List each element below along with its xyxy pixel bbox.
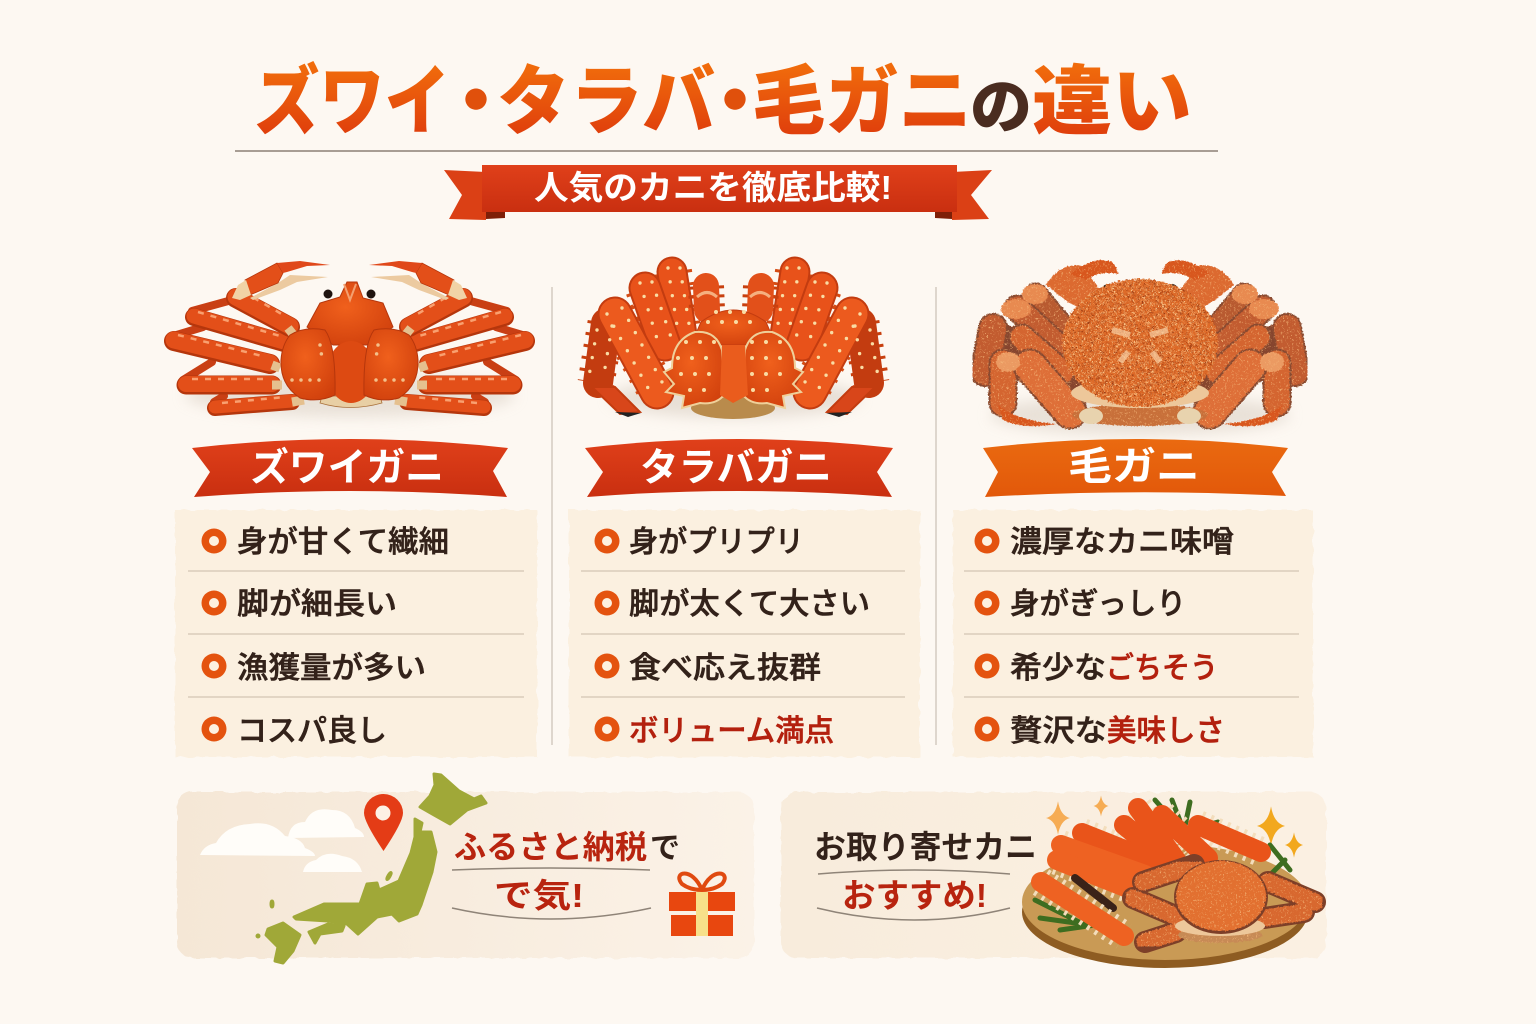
illustration: snow crab xyxy=(170,261,529,417)
name ribbon: ズワイガニ: ズワイガニ xyxy=(250,447,444,490)
bullet item: 贅沢な美味しさ: 贅沢な xyxy=(1010,715,1107,748)
bullet item: 濃厚なカニ味噌: 濃厚なカニ味噌 xyxy=(1010,526,1234,559)
banner text: ふるさと納税 xyxy=(454,829,647,865)
bullet item: 身が甘くて繊細: 身が甘くて繊細 xyxy=(237,526,449,559)
icon: gift box xyxy=(669,874,735,936)
banner text: お取り寄せカニ xyxy=(814,829,1037,865)
column divider 2 xyxy=(935,287,937,745)
banner text: で xyxy=(650,832,680,865)
icon: map of Japan xyxy=(257,774,486,963)
panel: mail-order crab banner xyxy=(781,792,1326,968)
bullet item: 漁獲量が多い: 漁獲量が多い xyxy=(237,652,426,685)
subtitle ribbon: 人気のカニを徹底比較! xyxy=(534,169,892,206)
icon: map pin xyxy=(364,794,403,851)
bullet item: 希少なごちそう xyxy=(974,652,1218,685)
bullet item: 希少なごちそう: 希少な xyxy=(1010,652,1106,685)
name ribbon: 毛ガニ xyxy=(983,439,1288,497)
panel: タラバガニ features xyxy=(569,510,920,757)
panel: furusato nozei banner xyxy=(177,774,754,963)
bullet item: 食べ応え抜群: 食べ応え抜群 xyxy=(629,652,821,685)
title: ・ xyxy=(438,60,514,145)
name ribbon: ズワイガニ xyxy=(192,439,508,497)
name ribbon: 毛ガニ: 毛ガニ xyxy=(1068,446,1200,489)
panel: ズワイガニ features xyxy=(175,510,537,757)
title: 違い xyxy=(1032,60,1192,145)
title: タラバ xyxy=(497,60,715,145)
banner text xyxy=(452,829,680,919)
bullet item: 脚が太くて大きい: 脚が太くて大さい xyxy=(629,588,870,621)
title: 毛ガニ xyxy=(752,60,972,145)
name ribbon: タラバガニ xyxy=(585,439,893,497)
bullet item: 脚が細長い: 脚が細長い xyxy=(237,588,397,621)
banner text: で気! xyxy=(494,877,584,914)
panel: 毛ガニ features xyxy=(953,510,1313,757)
illustration: hairy crab xyxy=(985,260,1295,435)
bullet item: 身がプリプリ: 身がプリプリ xyxy=(629,526,804,559)
clouds xyxy=(200,809,364,872)
name ribbon: タラバガニ: タラバガニ xyxy=(640,447,832,490)
title divider xyxy=(235,150,1218,152)
title xyxy=(254,60,1192,145)
title: ズワイ xyxy=(254,60,450,145)
column divider 1 xyxy=(551,287,553,745)
bullet item: 身がぎっしり: 身がぎっしり xyxy=(1010,588,1186,621)
bullet item: 希少なごちそう: ごちそう xyxy=(1106,652,1218,685)
subtitle ribbon xyxy=(444,165,992,220)
icon: sparkles xyxy=(1046,796,1303,858)
banner text xyxy=(814,829,1037,920)
title: ・ xyxy=(697,60,773,145)
title: の xyxy=(970,74,1032,141)
bullet item: 贅沢な美味しさ xyxy=(974,715,1225,748)
bullet item: コスパ良し: コスパ良し xyxy=(237,715,387,748)
illustration: crab platter xyxy=(1022,800,1315,968)
banner text: おすすめ! xyxy=(842,877,987,914)
bullet item: ボリューム満点: ボリューム満点 xyxy=(629,715,834,748)
bullet item: 贅沢な美味しさ: 美味しさ xyxy=(1107,715,1225,748)
illustration: king crab xyxy=(588,268,879,419)
